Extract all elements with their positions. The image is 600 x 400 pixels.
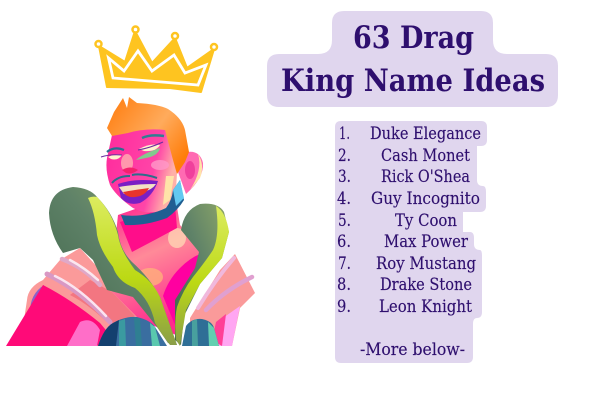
name list: 5. [338, 211, 351, 231]
name list: -More below- [360, 340, 465, 360]
name list: Max Power [384, 232, 469, 252]
face [101, 128, 177, 212]
title panel [267, 11, 558, 107]
name list: Duke Elegance [370, 124, 481, 144]
left sleeve [6, 248, 140, 346]
list panel [335, 121, 487, 363]
name list: 2. [338, 146, 351, 166]
heading: King Name Ideas [281, 63, 545, 99]
name list [337, 124, 481, 360]
name list: Guy Incognito [371, 189, 480, 209]
neck and torso [110, 195, 202, 335]
name list: Roy Mustang [376, 254, 476, 274]
name list: 3. [338, 167, 351, 187]
name list: Drake Stone [380, 275, 472, 295]
chest panels [98, 317, 219, 346]
name list: Leon Knight [379, 297, 472, 317]
ear [178, 152, 203, 194]
beard [121, 180, 184, 225]
left collar [49, 187, 177, 345]
nose [122, 168, 138, 174]
name list: 9. [337, 297, 351, 317]
heading [281, 20, 545, 99]
icon: golden crown [96, 26, 217, 92]
moustache [112, 174, 157, 183]
name list: 1. [339, 124, 350, 144]
name list: Ty Coon [395, 211, 457, 231]
name list: 8. [337, 275, 351, 295]
name list: 7. [338, 254, 351, 274]
right sleeve [190, 254, 255, 346]
name list: Cash Monet [381, 146, 470, 166]
name list: 4. [337, 189, 351, 209]
heading: 63 Drag [353, 20, 474, 56]
illustration: drag king portrait [6, 26, 255, 346]
name list: 6. [337, 232, 351, 252]
mouth [118, 180, 158, 204]
right collar [175, 204, 229, 346]
list background [335, 121, 487, 363]
title background [267, 11, 558, 107]
hair [107, 97, 189, 174]
name list: Rick O'Shea [381, 167, 470, 187]
eyes and brows [101, 135, 164, 160]
